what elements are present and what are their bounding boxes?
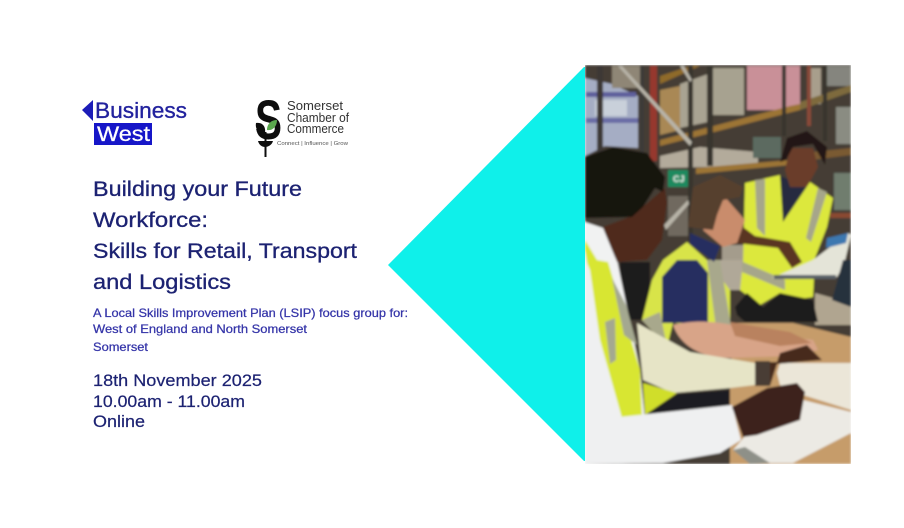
event details: date, time, location bbox=[93, 371, 262, 431]
woman: head and vest bbox=[735, 131, 851, 322]
monitor and table bbox=[730, 260, 851, 464]
warehouse goods: CJ bbox=[673, 174, 685, 184]
laptop bbox=[733, 400, 851, 464]
warehouse goods bbox=[585, 66, 851, 280]
paper roll, wristband and hand bbox=[755, 345, 851, 410]
title bbox=[93, 178, 357, 294]
logo: Somerset Chamber of Commerce: Commerce bbox=[287, 122, 344, 136]
logo: Somerset Chamber of Commerce: Somerset bbox=[287, 99, 344, 113]
logo: Somerset Chamber of Commerce bbox=[255, 88, 349, 157]
left man vest and shirt bbox=[585, 222, 741, 464]
subtitle: focus group description: West of England and North Somerset bbox=[93, 322, 308, 336]
left man hand bbox=[732, 383, 805, 437]
photo: warehouse workers bbox=[585, 65, 851, 464]
chair and background floor bbox=[620, 260, 851, 325]
event details: date, time, location: 18th November 2025 bbox=[93, 371, 262, 390]
title: and Logistics bbox=[93, 271, 231, 294]
logo: Business West: West bbox=[97, 123, 150, 146]
event details: date, time, location: 10.00am - 11.00am bbox=[93, 392, 245, 411]
subtitle: focus group description bbox=[93, 306, 408, 354]
logo: Business West: Business bbox=[95, 98, 187, 123]
shelving beams bbox=[597, 66, 851, 241]
logo: Somerset Chamber of Commerce: S bbox=[255, 88, 282, 151]
cyan triangle bbox=[388, 67, 585, 461]
left man sleeve bbox=[637, 323, 755, 393]
logo: Somerset Chamber of Commerce: Chamber of bbox=[287, 111, 349, 125]
left man head bbox=[585, 147, 667, 262]
subtitle: focus group description: A Local Skills Improvement Plan (LSIP) focus group for: bbox=[93, 306, 408, 320]
logo: Somerset Chamber of Commerce: Connect | Influence | Grow bbox=[277, 141, 348, 147]
event details: date, time, location: Online bbox=[93, 412, 145, 431]
middle man bbox=[642, 175, 818, 358]
title: Workforce: bbox=[93, 209, 208, 232]
title: Building your Future bbox=[93, 178, 302, 201]
subtitle: focus group description: Somerset bbox=[93, 340, 149, 354]
logo: Business West bbox=[82, 98, 187, 146]
title: Skills for Retail, Transport bbox=[93, 240, 357, 263]
